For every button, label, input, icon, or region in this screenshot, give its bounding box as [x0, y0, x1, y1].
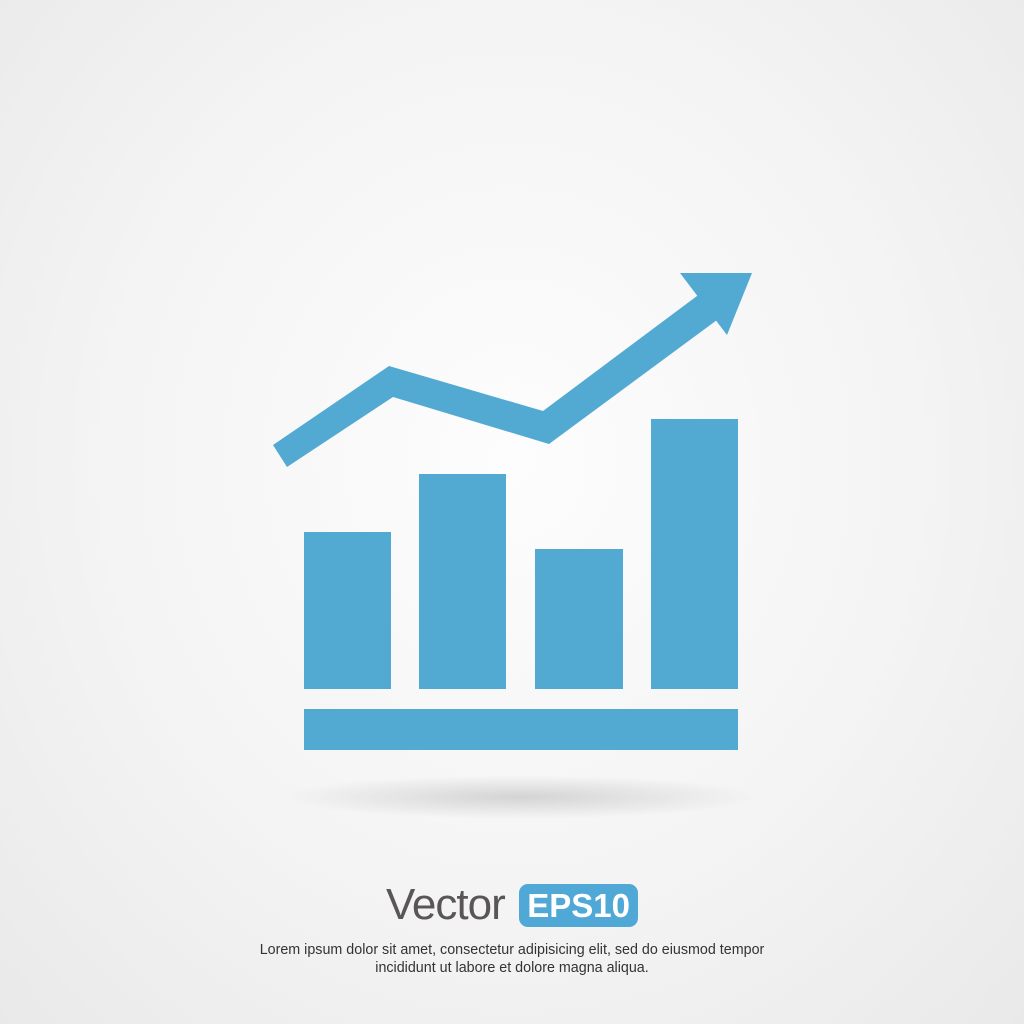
- heading: Vector EPS10: [386, 880, 638, 929]
- trend arrow: [273, 273, 752, 467]
- description text: Lorem ipsum dolor sit amet, consectetur adipisicing elit, sed do eiusmod tempor: [260, 942, 764, 958]
- base bar: [304, 709, 738, 750]
- description text: [260, 942, 764, 976]
- bars: [304, 419, 738, 750]
- heading: Vector EPS10: Vector: [386, 880, 505, 929]
- heading: Vector EPS10: EPS10: [527, 886, 630, 924]
- description text: incididunt ut labore et dolore magna aliqua.: [375, 960, 649, 976]
- shadow: [280, 775, 760, 819]
